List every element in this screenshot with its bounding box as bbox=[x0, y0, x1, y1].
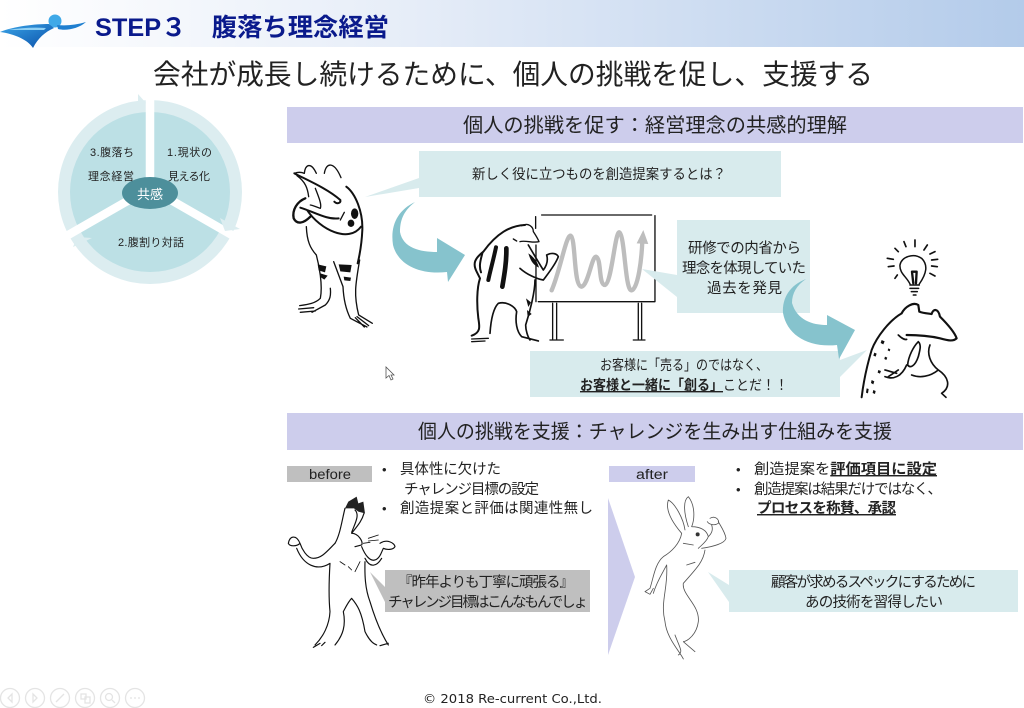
panel heading: encourage bbox=[287, 107, 1023, 143]
arrow: before to after bbox=[608, 498, 635, 655]
panel heading: support bbox=[287, 413, 1023, 450]
tag: before bbox=[287, 466, 372, 482]
callout: question bbox=[365, 151, 781, 197]
arrow: curved teal 2 bbox=[783, 279, 855, 359]
frog: thinking bbox=[862, 304, 957, 397]
callout: before quote: チャレンジ目標はこんなもんでしょ bbox=[388, 594, 588, 611]
text block: before bullets: 創造提案と評価は関連性無し bbox=[400, 500, 593, 517]
label: empathy: 共感 bbox=[137, 187, 163, 202]
tag: before: before bbox=[309, 467, 351, 482]
callout: before quote bbox=[370, 570, 590, 612]
text block: after bullets: • bbox=[736, 462, 741, 477]
frog: presenting at chart bbox=[472, 224, 558, 342]
main headline: 会社が成長し続けるために、個人の挑戦を促し、支援する bbox=[153, 59, 873, 90]
label: step 3: 理念経営 bbox=[88, 169, 134, 183]
text block: before bullets: • bbox=[382, 501, 387, 516]
callout: discovery: 過去を発見 bbox=[707, 280, 782, 297]
arrow: curved teal 1 bbox=[392, 202, 465, 282]
text block: before bullets: チャレンジ目標の設定 bbox=[404, 481, 539, 498]
label: step 3 bbox=[88, 145, 134, 183]
label: step 1 bbox=[167, 145, 212, 183]
callout: after quote: 顧客が求めるスペックにするために bbox=[771, 574, 976, 591]
cycle diagram bbox=[56, 92, 244, 284]
label: step 1: 1.現状の bbox=[167, 145, 212, 159]
frog: arms crossed bbox=[293, 165, 372, 327]
rabbit: flexing bbox=[645, 497, 726, 659]
callout: create with customers: お客様と一緒に「創る」ことだ！！ bbox=[580, 377, 788, 393]
text block: after bullets: 創造提案を 評価項目に設定 bbox=[754, 461, 937, 478]
label: step 2: 2.腹割り対話 bbox=[118, 235, 184, 249]
footer copyright: © 2018 Re-current Co.,Ltd. bbox=[423, 691, 602, 706]
text block: before bullets: 具体性に欠けた bbox=[400, 461, 501, 478]
callout: create with customers bbox=[530, 350, 867, 397]
chart: rising line on board bbox=[536, 215, 655, 340]
panel heading: support: 個人の挑戦を支援：チャレンジを生み出す仕組みを支援 bbox=[418, 421, 892, 443]
tag: after bbox=[609, 466, 695, 482]
callout: create with customers: お客様に「売る」のではなく、 bbox=[600, 357, 768, 373]
callout: after quote: あの技術を習得したい bbox=[805, 594, 943, 611]
text block: after bullets: 創造提案は結果だけではなく、 bbox=[754, 481, 942, 498]
callout: question: 新しく役に立つものを創造提案するとは？ bbox=[472, 166, 726, 182]
icon: company logo bbox=[0, 14, 86, 48]
slide navigation icons bbox=[0, 688, 144, 708]
text block: before bullets: • bbox=[382, 462, 387, 477]
icon: light bulb bbox=[887, 240, 938, 295]
title: step heading: STEP３ 腹落ち理念経営 bbox=[95, 14, 389, 42]
label: step 1: 見える化 bbox=[168, 170, 210, 183]
callout: before quote: 『昨年よりも丁寧に頑張る』 bbox=[398, 574, 574, 591]
text block: after bullets: プロセスを称賛、承認 bbox=[757, 500, 896, 517]
callout: discovery: 理念を体現していた bbox=[682, 260, 806, 277]
rabbit: shrugging bbox=[288, 497, 395, 647]
label: step 3: 3.腹落ち bbox=[90, 145, 134, 159]
callout: discovery: 研修での内省から bbox=[688, 240, 801, 257]
icon: cycle arrowheads bbox=[73, 94, 240, 247]
panel heading: encourage: 個人の挑戦を促す：経営理念の共感的理解 bbox=[463, 114, 847, 137]
icon: mouse cursor bbox=[386, 367, 394, 380]
text block: after bullets bbox=[736, 461, 942, 517]
text block: before bullets bbox=[382, 461, 593, 517]
callout: after quote bbox=[708, 570, 1018, 612]
tag: after: after bbox=[636, 467, 669, 482]
header band bbox=[0, 0, 1024, 47]
callout: discovery bbox=[642, 220, 810, 313]
text block: after bullets: • bbox=[736, 482, 741, 497]
center ellipse: empathy bbox=[122, 177, 178, 209]
